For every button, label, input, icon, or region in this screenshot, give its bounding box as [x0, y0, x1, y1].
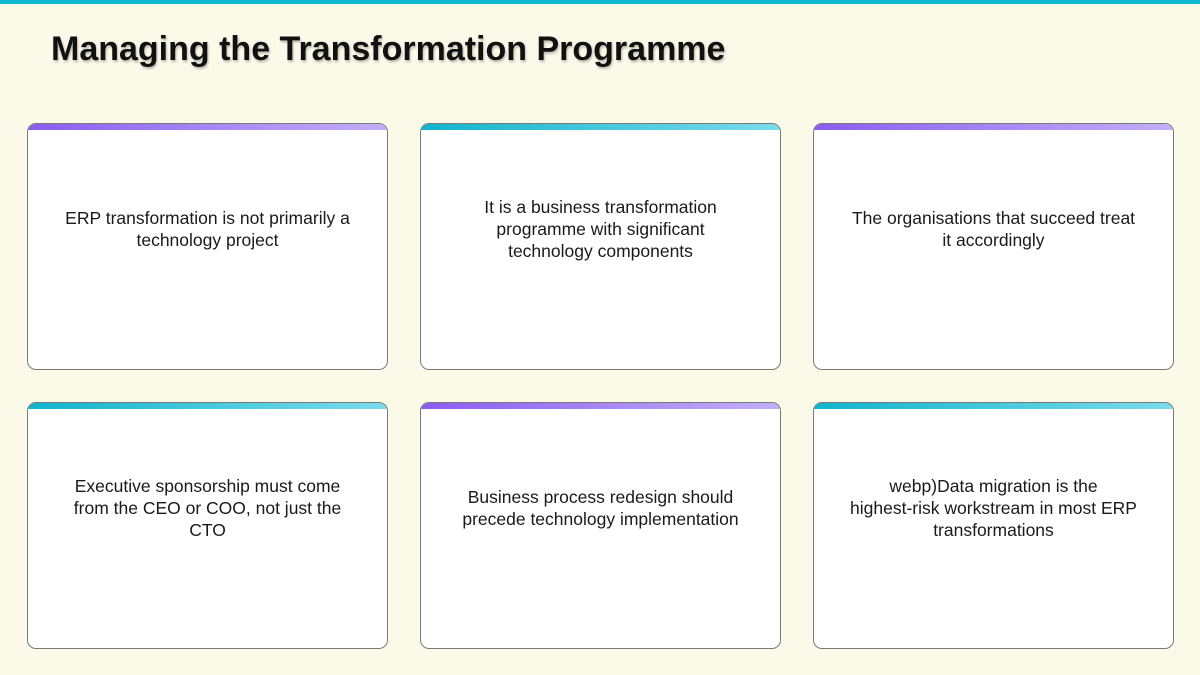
title: Managing the Transformation Programme	[51, 30, 725, 68]
card 5 text: Business process redesign should precede technology implementation	[462, 487, 739, 529]
card 2	[420, 123, 781, 370]
card 1	[27, 123, 388, 370]
card 6 text: webp)Data migration is the highest-risk workstream in most ERP transformations	[850, 476, 1137, 540]
card 3 text: The organisations that succeed treat it accordingly	[852, 208, 1135, 250]
card 4	[27, 402, 388, 649]
card 2 text: It is a business transformation programme with significant technology components	[484, 197, 717, 261]
card 1 text: ERP transformation is not primarily a technology project	[65, 208, 350, 250]
card 6	[813, 402, 1174, 649]
card 3	[813, 123, 1174, 370]
card 4 text: Executive sponsorship must come from the CEO or COO, not just the CTO	[74, 476, 341, 540]
card 5	[420, 402, 781, 649]
